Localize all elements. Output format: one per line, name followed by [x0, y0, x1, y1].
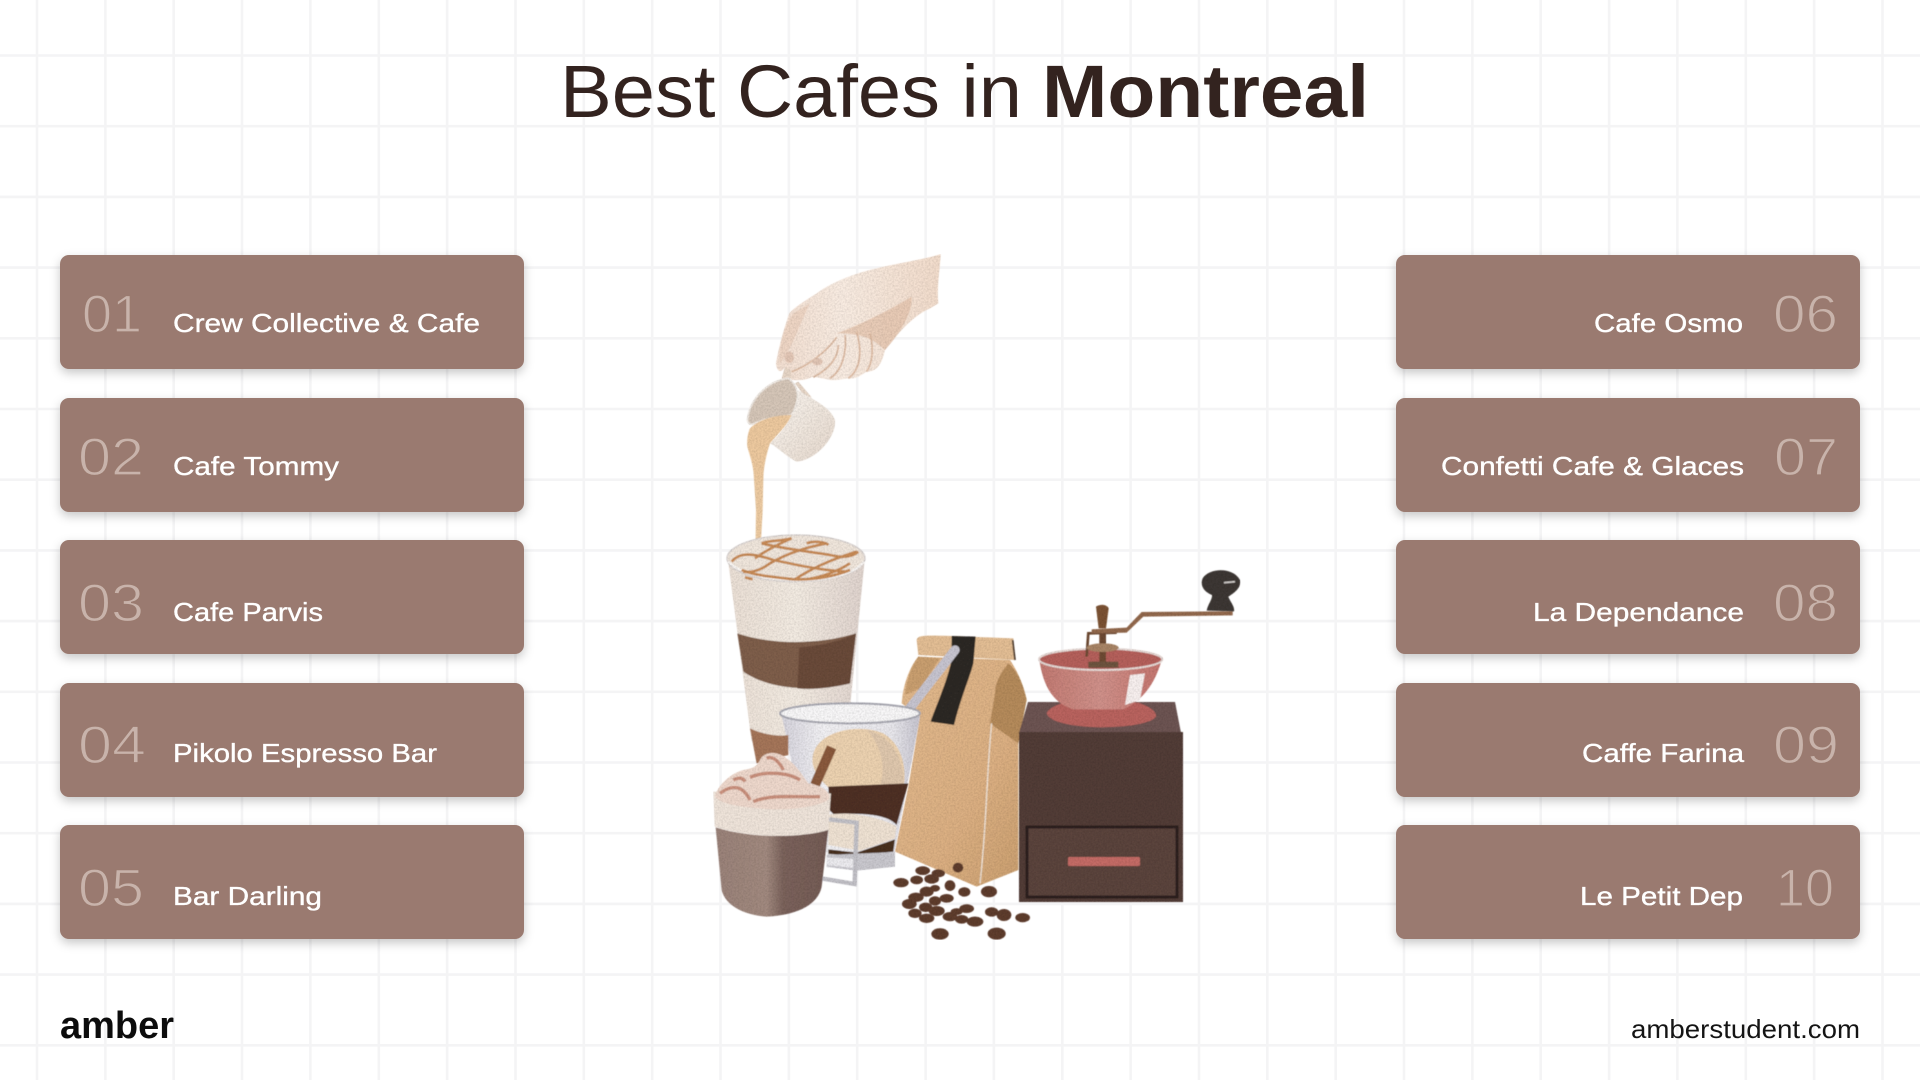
- card 02: [60, 398, 524, 512]
- website url: amberstudent.com: [1631, 1014, 1860, 1044]
- card 06: Cafe Osmo: [1594, 308, 1743, 338]
- card 02: Cafe Tommy: [173, 451, 339, 481]
- card 07: 07: [1774, 428, 1838, 487]
- illustration: coffee still life: [713, 254, 1240, 940]
- card 10: Le Petit Dep: [1580, 881, 1743, 911]
- icon: tall layered latte: [727, 535, 865, 742]
- card 03: 03: [78, 574, 144, 633]
- icon: latte bottom layer: [750, 728, 788, 763]
- card 03: Cafe Parvis: [173, 597, 323, 627]
- card 07: [1396, 398, 1860, 512]
- icon: coffee grinder: [1039, 570, 1240, 727]
- card 02: 02: [78, 428, 144, 487]
- card 04: Pikolo Espresso Bar: [173, 738, 437, 768]
- card 01: [60, 255, 524, 369]
- card 04: [60, 683, 524, 797]
- title: Montreal: [1042, 50, 1369, 133]
- card 10: 10: [1776, 859, 1834, 918]
- icon: milk jug with stream: [747, 367, 835, 560]
- card 05: 05: [78, 859, 144, 918]
- icon: grinder box: [1019, 702, 1183, 902]
- card 06: 06: [1773, 285, 1838, 344]
- panel: right list: [1396, 255, 1860, 939]
- card 08: 08: [1773, 574, 1838, 633]
- card 03: [60, 540, 524, 654]
- card 06: [1396, 255, 1860, 369]
- title: Best Cafes in: [560, 50, 1022, 133]
- card 09: 09: [1773, 716, 1839, 775]
- card 04: 04: [78, 716, 146, 775]
- icon: coffee bag: [895, 636, 1027, 887]
- card 09: Caffe Farina: [1582, 738, 1745, 768]
- card 05: [60, 825, 524, 939]
- icon: hand: [776, 254, 941, 380]
- logo: amber: amber: [60, 1005, 174, 1047]
- card 01: 01: [82, 285, 142, 344]
- card 08: [1396, 540, 1860, 654]
- card 01: Crew Collective & Cafe: [173, 308, 480, 338]
- card 09: [1396, 683, 1860, 797]
- panel: left list: [60, 255, 524, 939]
- card 08: La Dependance: [1533, 597, 1744, 627]
- card 05: Bar Darling: [173, 881, 322, 911]
- icon: glass with ice cream: [780, 703, 920, 871]
- card 07: Confetti Cafe & Glaces: [1441, 451, 1744, 481]
- card 10: [1396, 825, 1860, 939]
- icon: coffee beans: [893, 863, 1030, 940]
- title: [560, 50, 1369, 133]
- icon: cappuccino mug: [713, 747, 857, 917]
